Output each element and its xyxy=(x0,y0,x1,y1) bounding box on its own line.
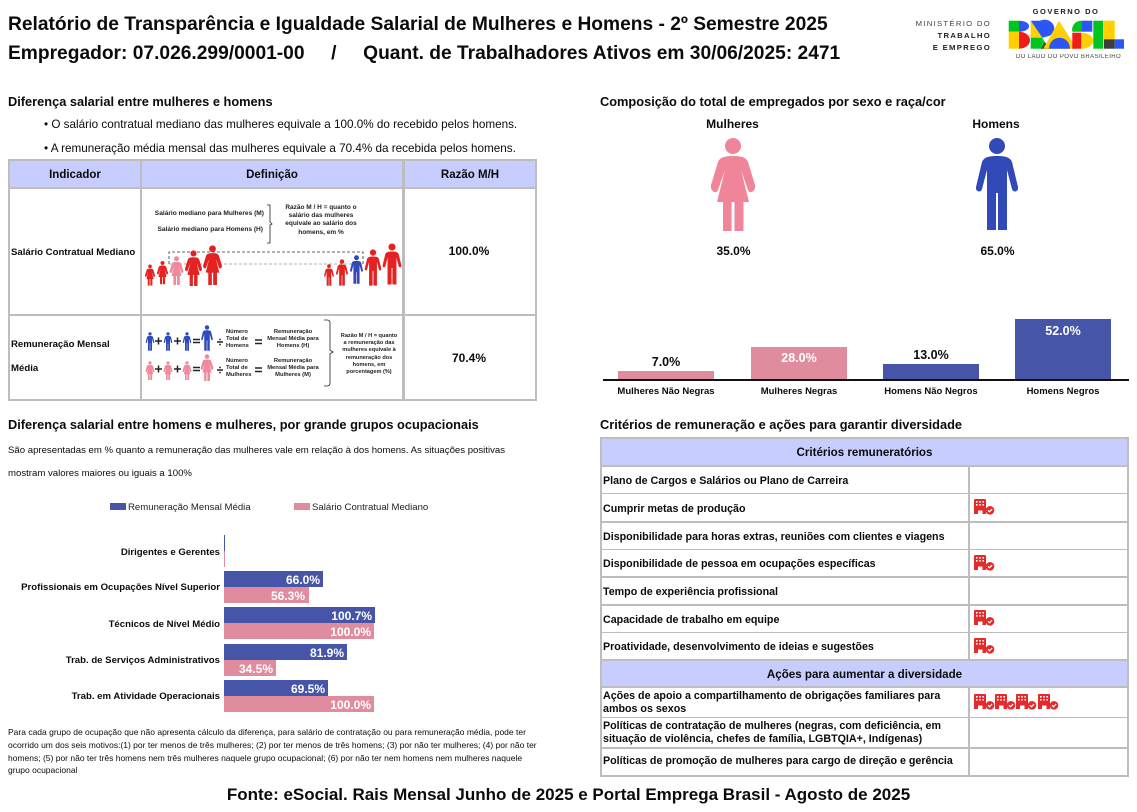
axis label: Mulheres Não Negras: Mulheres Não Negras xyxy=(617,386,715,397)
axis label: Mulheres Negras: Mulheres Negras xyxy=(761,386,837,397)
text: salário mediano labels xyxy=(155,210,264,233)
text: número total de homens: Número xyxy=(226,329,248,335)
text: remuneração homens: Homens (H) xyxy=(277,343,309,349)
heading: critérios: Critérios de remuneração e ações para garantir diversidade xyxy=(600,417,962,432)
group: Técnicos: 100.7% xyxy=(331,609,372,623)
source footer: Fonte: eSocial. Rais Mensal Junho de 2025 e Portal Emprega Brasil - Agosto de 2025 xyxy=(227,785,910,804)
group: Atividade Operacionais: 69.5% xyxy=(291,682,325,696)
text: remuneração mulheres: Mensal Média para xyxy=(267,365,319,371)
axis label: Homens Não Negros: Homens Não Negros xyxy=(884,386,978,397)
text block: explanation xyxy=(8,445,505,479)
row: Plano de Cargos: Plano de Cargos e Salários ou Plano de Carreira xyxy=(603,474,848,486)
text: número total de mulheres: Total de xyxy=(226,365,248,371)
group: Atividade Operacionais xyxy=(72,680,374,712)
bar: Mulheres Negras xyxy=(751,347,847,380)
group: Atividade Operacionais: 100.0% xyxy=(330,698,371,712)
icon: building check xyxy=(974,555,994,571)
logo: Ministério do Trabalho e Emprego: TRABALHO xyxy=(937,31,991,40)
column header: Razão M/H: Razão M/H xyxy=(441,168,499,180)
text: salário mediano labels: Salário mediano para Homens (H) xyxy=(157,226,263,233)
bar: Homens Negros xyxy=(1015,319,1111,380)
title xyxy=(8,14,840,64)
text: número total de homens: Homens xyxy=(226,343,249,349)
group: Serviços Administrativos: Trab. de Serviços Administrativos xyxy=(66,655,220,666)
bar chart: grupos ocupacionais xyxy=(21,535,375,712)
panel: indicator table xyxy=(8,159,537,401)
group: Dirigentes e Gerentes: Dirigentes e Gerentes xyxy=(121,547,220,558)
bar: Homens Não Negros xyxy=(883,364,979,380)
row: Disponibilidade ocupações: Disponibilidade de pessoa em ocupações específicas xyxy=(603,558,876,570)
bar: Homens Negros: 52.0% xyxy=(1045,324,1081,338)
row: Cumprir metas: Cumprir metas de produção xyxy=(603,502,746,514)
bar: Mulheres Negras: 28.0% xyxy=(781,351,817,365)
heading: grandes grupos ocupacionais: Diferença salarial entre homens e mulheres, por grande grupos ocupacionais xyxy=(8,417,479,432)
panel: critérios table xyxy=(600,437,1129,777)
legend: Remuneração Mensal Média xyxy=(128,502,251,513)
text block: explanation: São apresentadas em % quanto a remuneração das mulheres vale em relação à dos homens. As situações positivas xyxy=(8,445,505,456)
row label: Remuneração Mensal Média: Remuneração Mensal Média xyxy=(11,339,110,374)
logo: Governo do Brasil: GOVERNO DO xyxy=(1033,7,1099,16)
title: Relatório de Transparência e Igualdade Salarial de Mulheres e Homens - 2º Semestre 2025 xyxy=(8,14,828,35)
text: número total de homens xyxy=(226,329,249,349)
icon: woman xyxy=(711,138,755,231)
bar chart: raça/cor xyxy=(603,319,1129,397)
label: Homens: Homens xyxy=(972,117,1020,131)
text: número total de homens: Total de xyxy=(226,336,248,342)
group: Serviços Administrativos xyxy=(66,644,347,676)
icon: building check xyxy=(974,638,994,654)
column header: Definição: Definição xyxy=(246,168,298,180)
value: 100.0%: 100.0% xyxy=(449,244,489,258)
panel: homens xyxy=(972,117,1020,258)
header: Ações: Ações para aumentar a diversidade xyxy=(767,668,962,681)
column header: Indicador: Indicador xyxy=(49,168,101,180)
panel: mulheres xyxy=(706,117,759,258)
row label: Salário Contratual Mediano: Salário Contratual Mediano xyxy=(11,247,135,258)
title: Empregador: 07.026.299/0001-00 / Quant. de Trabalhadores Ativos em 30/06/2025: 2471 xyxy=(8,43,840,64)
icon: man xyxy=(976,138,1018,230)
icons: four building checks xyxy=(974,694,1058,710)
label: Mulheres: Mulheres xyxy=(706,117,759,131)
bar chart: raça/cor: 7.0% xyxy=(652,355,680,369)
text: número total de mulheres: Mulheres xyxy=(226,372,251,378)
logo: Ministério do Trabalho e Emprego xyxy=(916,19,991,52)
bar chart: raça/cor: 13.0% xyxy=(913,348,949,362)
row: Ações de apoio: Ações de apoio a compartilhamento de obrigações familiares para ambos os sexos xyxy=(603,690,940,715)
text: número total de mulheres xyxy=(226,358,252,378)
group: Profissionais: 66.0% xyxy=(286,573,320,587)
value: 35.0%: 35.0% xyxy=(716,244,751,258)
text: remuneração mulheres: Remuneração xyxy=(274,358,312,364)
text: remuneração mulheres: Mulheres (M) xyxy=(275,372,311,378)
value: 70.4%: 70.4% xyxy=(452,351,486,365)
row: Políticas de promoção: Políticas de promoção de mulheres para cargo de direção e gerência xyxy=(603,755,953,767)
logo: Governo do Brasil xyxy=(1008,7,1124,60)
text: remuneração mulheres xyxy=(267,358,319,378)
text: remuneração homens xyxy=(267,329,319,349)
legend xyxy=(110,502,428,513)
bar: Mulheres Não Negras xyxy=(618,371,714,380)
logo: Ministério do Trabalho e Emprego: MINISTÉRIO DO xyxy=(916,19,991,28)
group: Técnicos: Técnicos de Nível Médio xyxy=(109,619,220,630)
group: Técnicos: 100.0% xyxy=(330,625,371,639)
text: razão M/H explanation: Razão M / H = quanto a remuneração das mulheres equivale à remuneração dos homens, em porcentagem (%) xyxy=(341,333,397,375)
text: razão M/H explanation: Razão M / H = quanto o salário das mulheres equivale ao salário dos homens, em % xyxy=(285,204,357,236)
people diagram xyxy=(145,204,402,286)
row: Capacidade: Capacidade de trabalho em equipe xyxy=(603,614,779,626)
axis label: Homens Negros: Homens Negros xyxy=(1027,386,1099,397)
icon: building check xyxy=(974,610,994,626)
group: Profissionais: 56.3% xyxy=(271,589,305,603)
text block: explanation: mostram valores maiores ou iguais a 100% xyxy=(8,468,192,479)
group: Profissionais xyxy=(21,571,323,603)
text: remuneração homens: Mensal Média para xyxy=(267,336,319,342)
value: 65.0%: 65.0% xyxy=(980,244,1015,258)
row: Disponibilidade horas extras: Disponibilidade para horas extras, reuniões com clientes e viagens xyxy=(603,530,945,542)
header: Critérios remuneratórios: Critérios remuneratórios xyxy=(797,446,932,459)
group: Serviços Administrativos: 81.9% xyxy=(310,646,344,660)
text: remuneração homens: Remuneração xyxy=(274,329,312,335)
logo: Governo do Brasil: DO LADO DO POVO BRASILEIRO xyxy=(1016,54,1121,60)
heading: diferença salarial: Diferença salarial entre mulheres e homens xyxy=(8,94,273,108)
text block: salário contratual bullet: • O salário contratual mediano das mulheres equivale a 100.0% do recebido pelos homens. xyxy=(44,118,517,131)
group: Profissionais: Profissionais em Ocupações Nível Superior xyxy=(21,582,220,593)
group: Atividade Operacionais: Trab. em Atividade Operacionais xyxy=(72,691,220,702)
diagram: salário mediano xyxy=(145,204,402,286)
logo: Ministério do Trabalho e Emprego: E EMPREGO xyxy=(933,43,991,52)
legend: Salário Contratual Mediano xyxy=(312,502,428,513)
text block: footnote: Para cada grupo de ocupação que não apresenta cálculo da diferença, para salário de contratação ou para remuneração média, pode ter ocorrido um dos seis motivos:(1) por ter menos de três mulheres; (2) por ter menos de três homens; (3) por não ter mulheres; (4) por não ter homens; (5) por não ter três homens nem três mulheres naquele grupo ocupacional; (6) por não ter nem homens nem mulheres naquele grupo ocupacional xyxy=(8,727,537,775)
group: Técnicos xyxy=(108,607,375,639)
text block: remuneração bullet: • A remuneração média mensal das mulheres equivale a 70.4% da recebida pelos homens. xyxy=(44,142,516,155)
row: Políticas de contratação: Políticas de contratação de mulheres (negras, com deficiência, em situação de violência, chefes de família, LGBTQIA+, Indígenas) xyxy=(603,720,941,745)
text: salário mediano labels: Salário mediano para Mulheres (M) xyxy=(155,210,264,217)
row: Tempo de experiência: Tempo de experiência profissional xyxy=(603,586,778,598)
group: Serviços Administrativos: 34.5% xyxy=(239,662,273,676)
icon: building check xyxy=(974,499,994,515)
row: Proatividade: Proatividade, desenvolvimento de ideias e sugestões xyxy=(603,640,874,652)
heading: composição: Composição do total de empregados por sexo e raça/cor xyxy=(600,94,946,108)
text: número total de mulheres: Número xyxy=(226,358,248,364)
people equations xyxy=(146,320,334,386)
diagram: remuneração média xyxy=(146,320,397,386)
